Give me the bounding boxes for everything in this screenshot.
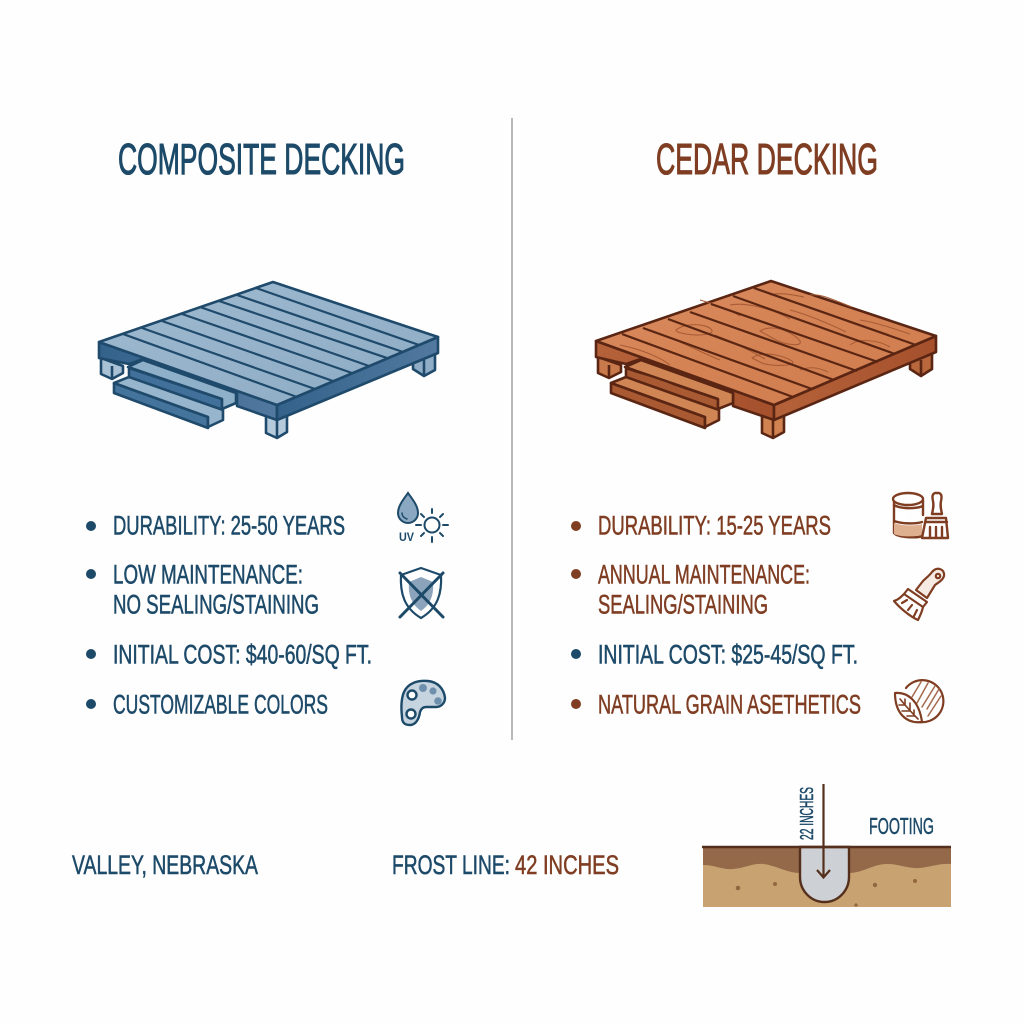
- list: composite facts: INITIAL COST: $40-60/SQ FT.: [113, 640, 372, 670]
- list: cedar facts: SEALING/STAINING: [598, 590, 768, 620]
- icon: crossed shield: [400, 568, 443, 618]
- illustration: composite deck: [99, 282, 438, 438]
- diagram: footing cross-section: [702, 784, 951, 907]
- list: cedar facts: ANNUAL MAINTENANCE:: [598, 560, 810, 590]
- frost line label: 42 INCHES: [515, 850, 619, 880]
- icon: palette: [401, 681, 445, 725]
- title: composite decking: COMPOSITE DECKING: [118, 135, 405, 184]
- list: cedar facts: INITIAL COST: $25-45/SQ FT.: [598, 640, 858, 670]
- list: composite facts: [86, 510, 372, 720]
- arrow: depth: [817, 784, 830, 878]
- icon: paint brush: [894, 569, 944, 620]
- list: cedar facts: DURABILITY: 15-25 YEARS: [598, 510, 831, 540]
- icon: water drop and UV sun: [398, 493, 448, 544]
- location label: VALLEY, NEBRASKA: [72, 850, 258, 880]
- icon: wood grain and leaf: [895, 680, 943, 722]
- list: composite facts: CUSTOMIZABLE COLORS: [113, 690, 328, 720]
- list: cedar facts: NATURAL GRAIN ASETHETICS: [598, 690, 861, 720]
- label: footing: FOOTING: [869, 813, 934, 839]
- list: composite facts: DURABILITY: 25-50 YEARS: [113, 510, 345, 540]
- label: 22 inches: 22 INCHES: [797, 787, 817, 840]
- list: cedar facts: [571, 510, 861, 720]
- icon: paint can and brush: [893, 493, 948, 538]
- divider: [511, 118, 513, 740]
- illustration: cedar deck: [596, 281, 936, 438]
- list: composite facts: NO SEALING/STAINING: [113, 590, 319, 620]
- title: cedar decking: CEDAR DECKING: [656, 135, 878, 184]
- icon: water drop and UV sun: UV: [399, 530, 414, 544]
- list: composite facts: LOW MAINTENANCE:: [113, 560, 303, 590]
- frost line label: FROST LINE:: [392, 850, 510, 880]
